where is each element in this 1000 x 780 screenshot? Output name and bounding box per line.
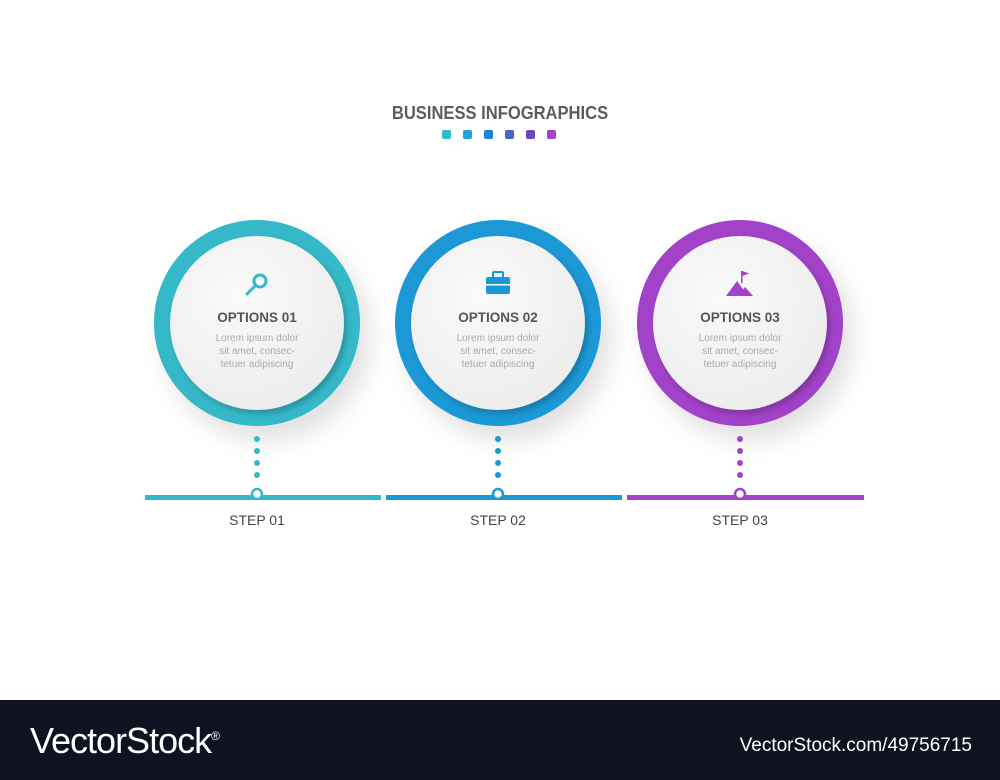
footer brand: VectorStock® <box>30 720 219 761</box>
step 3: Lorem ipsum dolor <box>699 333 782 344</box>
step 1: sit amet, consec- <box>219 346 295 357</box>
step 1: OPTIONS 01 <box>217 310 297 325</box>
footer id: VectorStock.com/49756715 <box>740 735 972 756</box>
step 3: tetuer adipiscing <box>704 359 776 370</box>
step 1 <box>145 220 381 528</box>
color squares <box>442 130 556 139</box>
title: BUSINESS INFOGRAPHICS <box>392 103 608 123</box>
icon: briefcase <box>486 272 510 294</box>
footer bar <box>0 700 1000 780</box>
step 2: tetuer adipiscing <box>462 359 534 370</box>
icon: magnifier <box>247 275 266 294</box>
icon: mountain flag <box>726 271 753 296</box>
step 2: STEP 02 <box>470 512 526 528</box>
step 1: Lorem ipsum dolor <box>216 333 299 344</box>
step 3 <box>627 220 864 528</box>
step 2: Lorem ipsum dolor <box>457 333 540 344</box>
step 3: sit amet, consec- <box>702 346 778 357</box>
step 1: STEP 01 <box>229 512 285 528</box>
step 2: sit amet, consec- <box>460 346 536 357</box>
step 3: OPTIONS 03 <box>700 310 780 325</box>
step 1: tetuer adipiscing <box>221 359 293 370</box>
step 2 <box>386 220 622 528</box>
step 2: OPTIONS 02 <box>458 310 538 325</box>
step 3: STEP 03 <box>712 512 768 528</box>
